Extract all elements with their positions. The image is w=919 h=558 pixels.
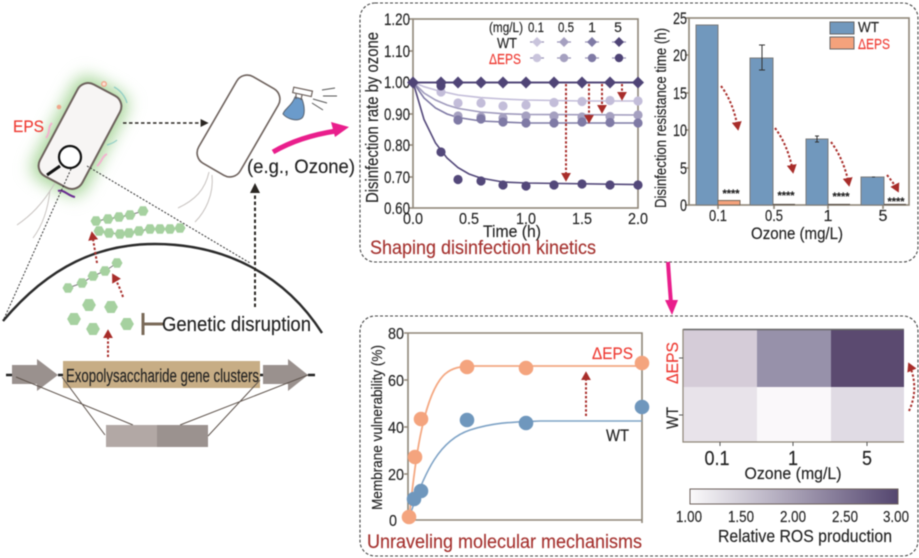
heading: shaping disinfection kinetics: Shaping disinfection kinetics <box>370 238 596 259</box>
bar chart: disinfection resistance time: 10 <box>673 122 687 140</box>
bar chart: disinfection resistance time: **** <box>777 190 795 202</box>
free EPS monomers <box>67 299 134 335</box>
dashed arrow to mutant cell <box>123 122 207 124</box>
bar chart: disinfection resistance time: 0.5 <box>765 208 783 225</box>
panel: shaping disinfection kinetics <box>360 3 918 262</box>
colour bar legend: 3.00 <box>883 509 909 526</box>
scatter chart: membrane vulnerability <box>369 326 649 530</box>
dotted lines from magnifier <box>3 166 250 321</box>
legend: concentration series <box>489 19 626 68</box>
bar chart: disinfection resistance time: 0 <box>680 197 687 215</box>
bar chart: disinfection resistance time: 25 <box>673 10 687 28</box>
heatmap: relative ROS production: Ozone (mg/L) <box>744 465 842 483</box>
bar chart: disinfection resistance time: WT <box>858 19 879 36</box>
heatmap: relative ROS production: 0.1 <box>704 448 730 470</box>
magnifying glass <box>47 146 81 175</box>
line chart: disinfection rate: 0.70 <box>384 168 410 187</box>
red synthesis arrows <box>92 233 123 357</box>
heading: unraveling molecular mechanisms: Unraveling molecular mechanisms <box>367 532 642 553</box>
heatmap: relative ROS production <box>663 329 914 483</box>
line chart: disinfection rate <box>362 10 648 241</box>
line chart: disinfection rate: 0.5 <box>459 211 479 228</box>
colour bar legend: 2.50 <box>832 509 858 526</box>
heatmap: relative ROS production: ΔEPS <box>663 342 682 384</box>
colour bar legend: 1.00 <box>676 509 702 526</box>
label: e.g., Ozone: (e.g., Ozone) <box>247 156 355 178</box>
scatter chart: membrane vulnerability: 40 <box>388 420 404 437</box>
bar chart: disinfection resistance time: ΔEPS <box>858 36 890 53</box>
legend: concentration series: 0.5 <box>558 19 574 35</box>
colour bar legend <box>676 489 909 546</box>
scatter chart: membrane vulnerability: 80 <box>388 326 404 343</box>
legend: concentration series: 5 <box>614 19 622 35</box>
colour bar legend: Relative ROS production <box>718 526 892 546</box>
scatter chart: membrane vulnerability: 0 <box>389 513 397 530</box>
colour bar legend: 2.00 <box>780 509 806 526</box>
label: EPS: EPS <box>13 117 44 136</box>
pink arrow to top panel <box>273 122 349 152</box>
heatmap: relative ROS production: 5 <box>862 448 872 470</box>
scatter chart: membrane vulnerability: 60 <box>388 373 404 390</box>
bacterium with EPS <box>17 71 134 238</box>
panel: unraveling molecular mechanisms <box>360 316 918 556</box>
bar chart: disinfection resistance time: **** <box>722 188 740 200</box>
heatmap: relative ROS production: WT <box>663 407 682 429</box>
line chart: disinfection rate: 2.0 <box>628 211 648 228</box>
gene map <box>6 359 315 447</box>
bar chart: disinfection resistance time: 20 <box>673 47 687 65</box>
scatter chart: membrane vulnerability: WT <box>606 426 629 445</box>
EPS polymer chains <box>62 206 186 293</box>
dashed arrow: disruption to mutant <box>254 185 256 307</box>
scatter chart: membrane vulnerability: Membrane vulnerability (%) <box>369 345 386 510</box>
line chart: disinfection rate: 1.5 <box>572 211 592 228</box>
legend: concentration series: WT <box>497 35 517 52</box>
line chart: disinfection rate: 0.60 <box>384 199 410 218</box>
bar chart: disinfection resistance time: **** <box>832 191 850 203</box>
scatter chart: membrane vulnerability: 20 <box>388 467 404 484</box>
icon: spray bottle <box>283 87 337 120</box>
bar chart: disinfection resistance time: 5 <box>879 208 888 225</box>
bar chart: disinfection resistance time: 0.1 <box>709 208 727 225</box>
legend: concentration series: 0.1 <box>528 19 544 35</box>
line chart: disinfection rate: 1.10 <box>384 42 410 61</box>
line chart: disinfection rate: 1.0 <box>516 211 536 228</box>
line chart: disinfection rate: 1.20 <box>384 10 410 29</box>
line chart: disinfection rate: 0.90 <box>384 105 410 124</box>
bar chart: disinfection resistance time: 1 <box>824 208 833 225</box>
bar chart: disinfection resistance time: 15 <box>673 85 687 103</box>
line chart: disinfection rate: 0.0 <box>403 211 423 228</box>
line chart: disinfection rate: Disinfection rate by ozone <box>362 32 382 203</box>
bar chart: disinfection resistance time: 5 <box>680 160 687 178</box>
inhibition bar <box>143 313 163 335</box>
scatter chart: membrane vulnerability: ΔEPS <box>592 344 633 363</box>
legend: concentration series: (mg/L) <box>489 19 523 35</box>
gene map: Exopolysaccharide gene clusters <box>66 366 259 386</box>
colour bar legend: 1.50 <box>728 509 754 526</box>
bar chart: disinfection resistance time <box>653 10 909 243</box>
line chart: disinfection rate: 0.80 <box>384 136 410 155</box>
legend: concentration series: 1 <box>588 19 596 35</box>
line chart: disinfection rate: 1.00 <box>384 73 410 92</box>
legend: concentration series: ΔEPS <box>489 52 521 68</box>
line chart: disinfection rate: Time (h) <box>483 223 541 241</box>
bar chart: disinfection resistance time: **** <box>887 196 905 208</box>
bacterium without EPS <box>178 71 284 222</box>
pink arrow between panels <box>665 262 678 315</box>
label: Genetic disruption: Genetic disruption <box>162 314 311 336</box>
heatmap: relative ROS production: 1 <box>788 448 798 470</box>
cell membrane arc <box>3 244 322 333</box>
bar chart: disinfection resistance time: Ozone (mg/L) <box>751 225 843 243</box>
